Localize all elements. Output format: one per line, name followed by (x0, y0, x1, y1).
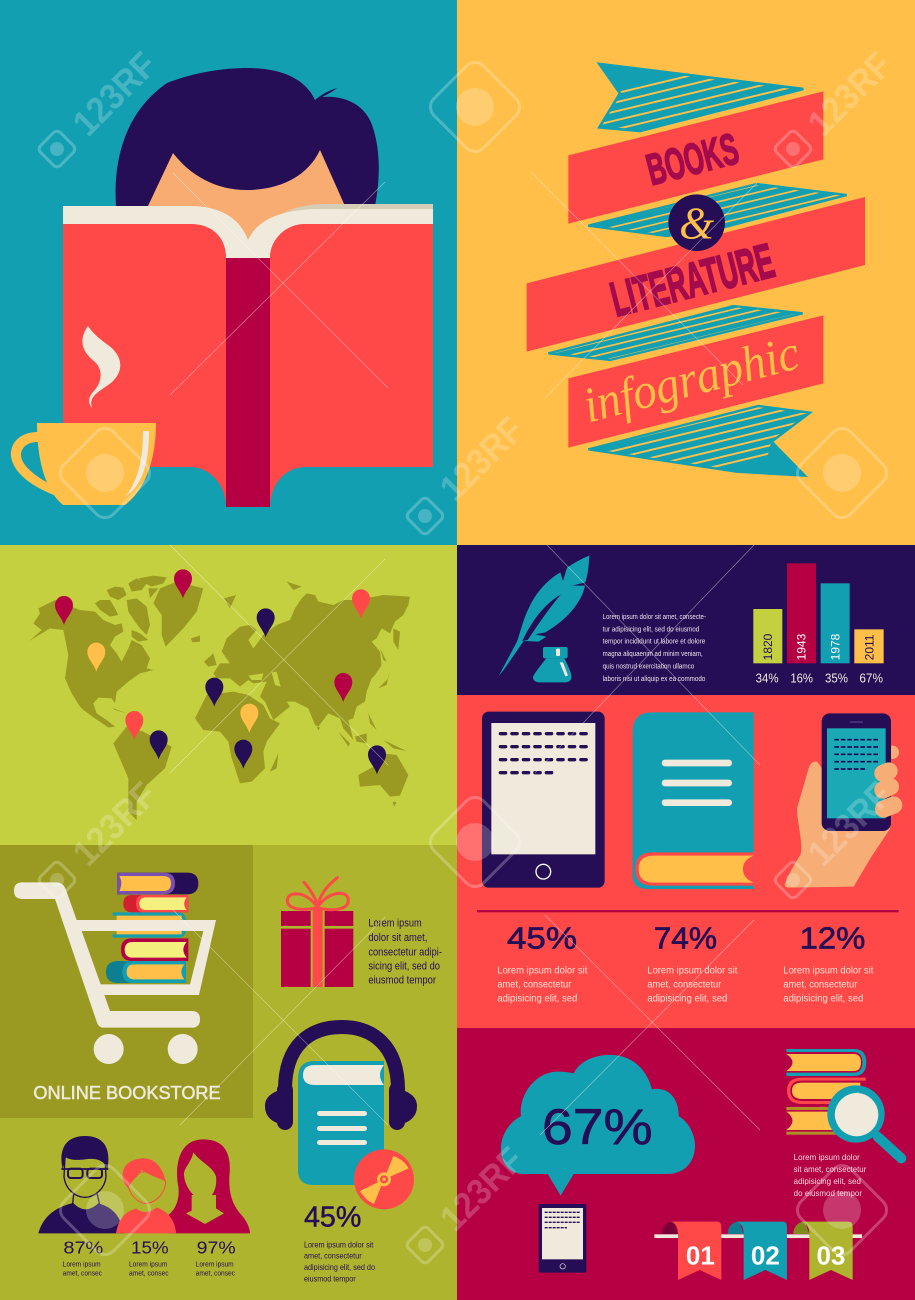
panel: olive background (0, 845, 457, 1300)
stat: 15 percent (129, 1237, 169, 1277)
ribbon 01 (662, 1222, 721, 1280)
stat: 87 percent: amet, consec (63, 1270, 102, 1277)
heading: literature: LITERATURE (605, 234, 780, 327)
ribbon 02: 02 (751, 1240, 780, 1270)
stat: 15 percent: 15% (131, 1237, 169, 1257)
ribbon title (526, 62, 865, 477)
panel: reader (0, 0, 457, 545)
icon: coffee cup (11, 423, 156, 505)
hair (116, 68, 379, 206)
icon: tablet (539, 1204, 586, 1273)
stat: 74 percent: 74% (654, 921, 717, 955)
stat: 45 percent: adipisicing elit, sed (497, 994, 577, 1005)
stat: 45 percent: amet, consectetur (497, 980, 572, 991)
ribbon tail lower (548, 304, 803, 362)
stat: 15 percent: Lorem ipsum (129, 1262, 167, 1269)
stat: 45 percent: 45% (507, 921, 577, 955)
panel: readers and audio text (38, 1136, 414, 1283)
heading: books: BOOKS (642, 124, 744, 195)
stat: 97 percent (196, 1237, 236, 1277)
icon: cloud: 67% (542, 1099, 653, 1155)
panel: title banner (457, 0, 915, 545)
text block: sit amet, consectetur (794, 1164, 866, 1174)
text block: consectetur adipi- (368, 946, 442, 958)
text block (794, 1152, 866, 1198)
icon: book (633, 712, 754, 889)
ribbon tail top (596, 62, 804, 132)
map pins (55, 569, 386, 774)
rail (654, 1234, 862, 1238)
bar chart: 1943 (795, 633, 809, 660)
text block (368, 918, 442, 987)
text block: Lorem ipsum dolor (794, 1152, 860, 1162)
ribbon 3 (568, 315, 823, 448)
world map (29, 576, 410, 820)
stat: 74 percent: amet, consectetur (647, 980, 722, 991)
icon: inkwell (533, 647, 571, 682)
stat: 74 percent: adipisicing elit, sed (647, 994, 727, 1005)
ribbon 03 (793, 1222, 853, 1280)
ribbon 03: 03 (817, 1240, 845, 1270)
ribbon tail bottom (588, 404, 813, 477)
stat: 74 percent (647, 921, 738, 1005)
stat: 87 percent: 87% (63, 1237, 103, 1257)
ribbon tail middle (588, 182, 847, 238)
icon: disc (354, 1149, 414, 1209)
icon: shopping cart (14, 882, 216, 1064)
icon: steam (82, 326, 120, 408)
stat: audiobook 45 percent: eiusmod tempor (304, 1273, 356, 1283)
open book (63, 204, 433, 507)
ampersand badge (668, 194, 725, 251)
text block: magna aliquaenim ad minim veniam, (603, 649, 703, 658)
label: ONLINE BOOKSTORE (33, 1082, 221, 1103)
icon: man (38, 1136, 124, 1233)
text: 123RF (800, 44, 899, 144)
text block: tempor incididunt ut labore et dolore (603, 637, 705, 646)
stat: 87 percent (63, 1237, 103, 1277)
stat: 74 percent: Lorem ipsum dolor sit (647, 965, 738, 976)
text block: dolor sit amet, (368, 932, 427, 944)
text block: laboris nisi ut aliquip ex ea commodo (603, 674, 705, 683)
ribbon 1 (568, 91, 823, 224)
stat: audiobook 45 percent: Lorem ipsum dolor sit (304, 1239, 374, 1249)
stat: 97 percent: amet, consec (196, 1270, 235, 1277)
ribbon 01: 01 (686, 1240, 715, 1270)
bar chart (753, 563, 884, 685)
text: 123RF (432, 1139, 531, 1239)
bar chart: 35% (825, 671, 848, 685)
ribbon 02 (728, 1222, 787, 1280)
icon: cloud (501, 1055, 695, 1196)
icon: hand holding phone (784, 713, 899, 888)
stat: 15 percent: amet, consec (129, 1270, 169, 1277)
bar chart: 16% (790, 671, 813, 685)
stat: 45 percent (497, 921, 588, 1005)
stat: 12 percent (783, 921, 874, 1005)
bar chart: 34% (756, 671, 779, 685)
panel: cloud and library (457, 1028, 915, 1300)
stat: 97 percent: 97% (197, 1237, 236, 1257)
icon: stack of books (106, 873, 198, 983)
ribbon 2 (527, 197, 865, 352)
text block (603, 612, 706, 683)
text block: Lorem ipsum dolor sit amet, consecte- (603, 612, 706, 621)
text block: sicing elit, sed do (368, 960, 440, 972)
icon: books stack (786, 1049, 866, 1135)
audiobook (298, 1061, 384, 1185)
stat: audiobook 45 percent: amet, consectetur (304, 1251, 362, 1261)
text block: quis nostrud exercitation ullamco (603, 662, 694, 671)
stat: audiobook 45 percent: adipisicing elit, sed do (304, 1262, 375, 1272)
panel: devices (457, 695, 915, 1028)
icon: woman (168, 1139, 250, 1233)
panel: online bookstore (0, 845, 442, 1118)
text block: tur adipisicing elit, sed do eiusmod (603, 624, 699, 633)
icon: e-reader (482, 712, 605, 888)
stat: audiobook 45 percent (304, 1202, 375, 1283)
panel: history chart (457, 545, 915, 695)
text block: Lorem ipsum (368, 918, 422, 930)
text: 123RF (65, 774, 164, 874)
text block: eiusmod tempor (368, 975, 436, 987)
bar chart: 1820 (761, 633, 775, 660)
bar chart: 1978 (828, 633, 842, 660)
stat: 12 percent: amet, consectetur (783, 980, 858, 991)
text block: adipisicing elit, sed (794, 1176, 861, 1186)
icon: audiobook headphones (265, 1027, 417, 1185)
stat: 97 percent: Lorem ipsum (196, 1262, 234, 1269)
stat: 12 percent: 12% (800, 921, 865, 955)
stat: 12 percent: Lorem ipsum dolor sit (783, 965, 874, 976)
icon: gift (281, 878, 353, 987)
text: 123RF (432, 409, 531, 509)
text: 123RF (65, 44, 164, 144)
bar chart: 2011 (862, 634, 876, 660)
face (148, 150, 345, 240)
bar chart: 67% (859, 671, 883, 685)
stat: 12 percent: adipisicing elit, sed (783, 994, 863, 1005)
icon: magnifier (827, 1085, 901, 1158)
stat: audiobook 45 percent: 45% (304, 1202, 361, 1234)
icon: child (116, 1158, 176, 1233)
text: 123RF (800, 774, 899, 874)
stat: 87 percent: Lorem ipsum (63, 1262, 101, 1269)
stat: 45 percent: Lorem ipsum dolor sit (497, 965, 588, 976)
ampersand badge: & (679, 198, 714, 248)
text block: do eiusmod tempor (794, 1188, 862, 1198)
divider (477, 910, 899, 912)
panel: world map (0, 545, 457, 845)
icon: quill (499, 556, 589, 676)
heading: infographic: infographic (577, 324, 805, 433)
